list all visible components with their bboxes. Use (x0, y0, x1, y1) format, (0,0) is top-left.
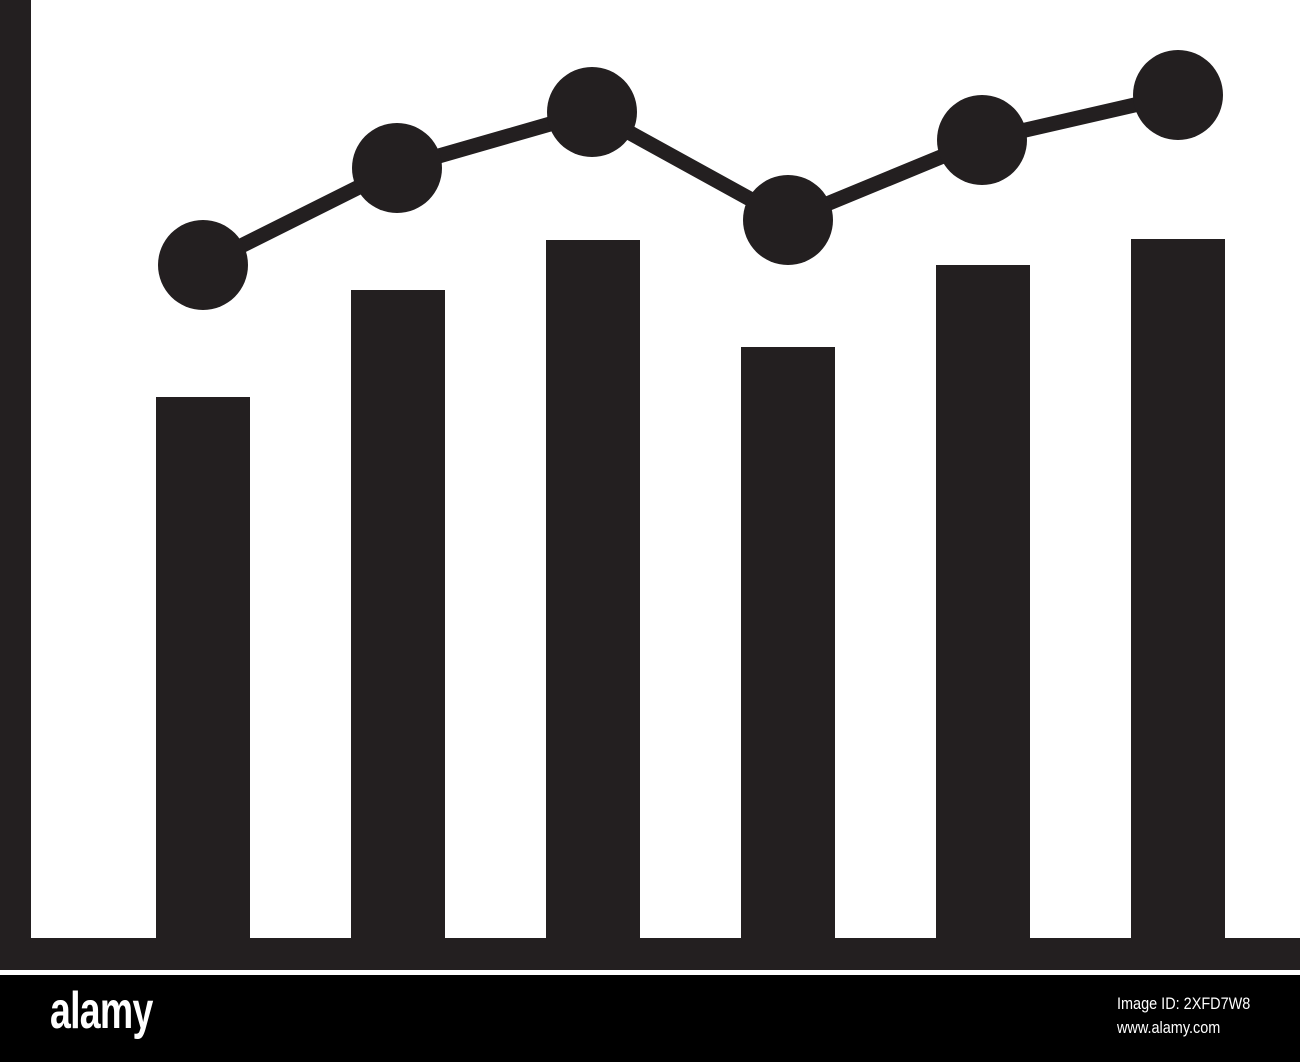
image info text: Image ID: 2XFD7W8 (1117, 994, 1250, 1013)
image info text (1117, 994, 1250, 1037)
logo: alamy: alamy (50, 982, 153, 1040)
image info text: www.alamy.com (1117, 1018, 1220, 1037)
trend line with dots (158, 50, 1223, 310)
footer bar (0, 975, 1300, 1062)
bars (156, 239, 1225, 942)
